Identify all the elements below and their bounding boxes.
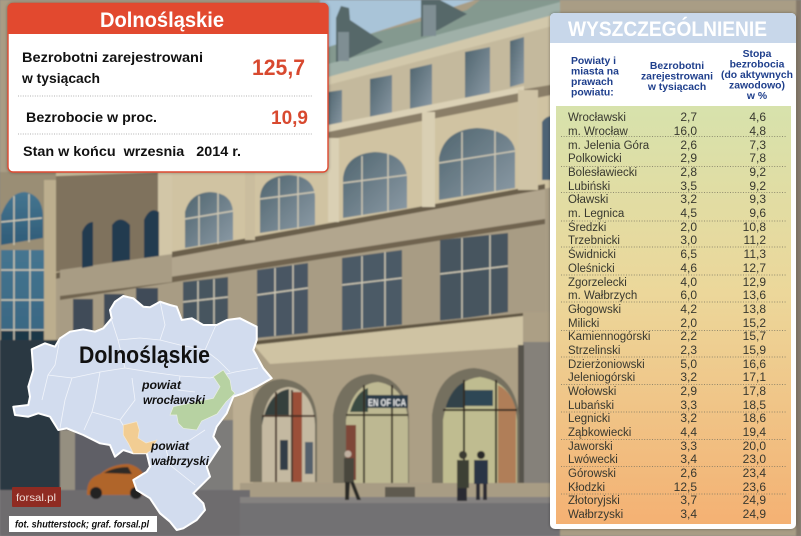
ground floor wall xyxy=(0,312,560,500)
table rows: 15,2 xyxy=(743,316,766,330)
table rows: m. Legnica xyxy=(568,208,625,220)
table rows: Dzierżoniowski xyxy=(568,359,645,371)
table rows: 13,8 xyxy=(743,302,766,316)
logo: forsal.pl: forsal.pl xyxy=(16,492,56,504)
table rows: 23,6 xyxy=(743,480,766,494)
dormer left xyxy=(336,6,383,62)
window storey wall xyxy=(60,219,545,345)
panel header: Dolnośląskie xyxy=(100,8,224,32)
rectangular window H xyxy=(342,250,402,332)
table rows: 12,9 xyxy=(743,275,766,289)
car xyxy=(87,464,146,499)
arch 1 xyxy=(250,379,317,482)
table rows: 4,5 xyxy=(680,206,697,220)
column header: unemployment rate: Stopa xyxy=(743,49,772,60)
column header: registered unemployed: Bezrobotni xyxy=(650,61,704,72)
arch 2 xyxy=(333,374,409,483)
table rows: Ząbkowiecki xyxy=(568,427,631,439)
table rows: Głogowski xyxy=(568,304,621,316)
table rows: 18,6 xyxy=(743,411,766,425)
column header: unemployment rate: (do aktywnych xyxy=(721,70,793,81)
table rows: 24,9 xyxy=(743,507,766,521)
table rows: 6,5 xyxy=(680,247,697,261)
table rows: 19,4 xyxy=(743,425,766,439)
column header: district xyxy=(571,56,619,98)
arched window D xyxy=(542,116,552,180)
map outline xyxy=(13,296,272,530)
table rows: 3,3 xyxy=(680,439,697,453)
sign in arch window xyxy=(366,395,408,409)
table rows: 17,1 xyxy=(743,370,766,384)
table rows: 7,3 xyxy=(749,138,766,152)
map title: Dolnośląskie xyxy=(79,342,210,369)
sign in arch window: EN OF ICA xyxy=(368,398,406,409)
narrow triple window xyxy=(82,210,159,268)
table rows: 7,8 xyxy=(749,151,766,165)
map: Dolnośląskie voivodeship xyxy=(13,296,272,530)
rectangular window G xyxy=(440,233,508,322)
roof xyxy=(328,0,560,76)
table rows: Lubański xyxy=(568,400,614,412)
table rows: 20,0 xyxy=(743,439,766,453)
label: powiat wałbrzyski: wałbrzyski xyxy=(151,454,210,468)
table rows: Wałbrzyski xyxy=(568,509,623,521)
table rows: 4,4 xyxy=(680,425,697,439)
unemployment rate value: 10,9 xyxy=(271,107,308,129)
label: powiat wrocławski xyxy=(141,378,206,407)
table rows: 3,7 xyxy=(680,493,697,507)
table rows: 2,8 xyxy=(680,165,697,179)
date note: Stan w końcu wrzesnia 2014 r. xyxy=(23,144,241,159)
table rows: m. Jelenia Góra xyxy=(568,140,650,152)
small windows K L M xyxy=(73,288,158,337)
column header: unemployment rate: zawodowo) xyxy=(729,80,785,92)
table rows: Jaworski xyxy=(568,441,613,453)
table rows: Wrocławski xyxy=(568,112,626,124)
table rows: 2,7 xyxy=(680,110,697,124)
table rows: 9,6 xyxy=(749,206,766,220)
table rows: 2,2 xyxy=(680,329,697,343)
table rows: 2,9 xyxy=(680,151,697,165)
column header: registered unemployed: zarejestrowani xyxy=(641,72,713,82)
table rows: 3,2 xyxy=(680,192,697,206)
panel header xyxy=(8,4,328,34)
column header: district: powiatu: xyxy=(571,88,614,98)
table rows: Milicki xyxy=(568,318,599,330)
table rows: 6,0 xyxy=(680,288,697,302)
table rows: 12,5 xyxy=(674,480,697,494)
table rows: 2,6 xyxy=(680,138,697,152)
table rows: 2,3 xyxy=(680,343,697,357)
table rows: 4,6 xyxy=(749,110,766,124)
powiat wrocławski: green area xyxy=(170,370,235,430)
table rows: 17,8 xyxy=(743,384,766,398)
storey ledges xyxy=(55,184,545,279)
table rows: 18,5 xyxy=(743,398,766,412)
table rows: 11,2 xyxy=(744,233,766,247)
rectangular window I xyxy=(257,263,308,338)
table rows: Kłodzki xyxy=(568,482,605,494)
pavement xyxy=(0,490,250,536)
column header: district: Powiaty i xyxy=(571,56,616,67)
table rows: Legnicki xyxy=(568,413,610,425)
table rows: 3,4 xyxy=(680,452,697,466)
relief spandrel band xyxy=(60,184,545,296)
table rows: Lubiński xyxy=(568,181,610,193)
table rows: 2,0 xyxy=(680,316,697,330)
arched window E xyxy=(185,192,233,248)
registered unemployed label: Bezrobotni zarejestrowani xyxy=(22,50,203,65)
table rows: Górowski xyxy=(568,468,616,480)
label: powiat wałbrzyski xyxy=(150,439,210,468)
table rows: 23,4 xyxy=(743,466,766,480)
table rows: Jeleniogórski xyxy=(568,372,635,384)
sky xyxy=(320,0,475,50)
left ground floor xyxy=(0,340,62,495)
panel: table by district xyxy=(550,13,796,529)
upper storey xyxy=(328,14,560,140)
table rows: 16,6 xyxy=(743,357,766,371)
table rows: 4,8 xyxy=(749,124,766,138)
arched window B xyxy=(343,152,407,218)
table rows: m. Wrocław xyxy=(568,126,629,138)
panel: Dolnośląskie summary xyxy=(8,4,328,172)
district borders xyxy=(42,301,258,485)
table rows: Średzki xyxy=(568,221,606,234)
column header: unemployment rate xyxy=(721,49,793,102)
table rows: Strzelinski xyxy=(568,345,620,357)
table rows: 3,2 xyxy=(680,411,697,425)
registered unemployed label xyxy=(21,50,203,86)
table rows: 10,8 xyxy=(743,220,766,234)
balcony ledge xyxy=(268,84,556,153)
table rows: 12,7 xyxy=(743,261,766,275)
table rows: 3,5 xyxy=(680,179,697,193)
table rows: 4,2 xyxy=(680,302,697,316)
table rows: Złotoryjski xyxy=(568,495,620,507)
table rows: 13,6 xyxy=(743,288,766,302)
table rows: Polkowicki xyxy=(568,153,622,165)
table rows: Oleśnicki xyxy=(568,263,615,275)
column header: unemployment rate: w % xyxy=(746,91,767,102)
table rows: 4,6 xyxy=(680,261,697,275)
table rows: Kamiennogórski xyxy=(568,331,650,343)
pedestrians group xyxy=(457,451,488,501)
pedestrian xyxy=(344,450,361,500)
registered unemployed value: 125,7 xyxy=(252,55,305,80)
rectangular window J xyxy=(183,277,228,330)
table rows xyxy=(568,110,766,521)
table rows: 2,0 xyxy=(680,220,697,234)
registered unemployed label: w tysiącach xyxy=(21,71,100,86)
table rows: 5,0 xyxy=(680,357,697,371)
logo: forsal.pl xyxy=(12,487,61,507)
table rows: 2,6 xyxy=(680,466,697,480)
arched window C xyxy=(439,128,515,200)
unemployment rate label: Bezrobocie w proc. xyxy=(26,110,157,125)
arched window A xyxy=(260,175,315,233)
main storey wall xyxy=(0,92,560,280)
table rows: 23,0 xyxy=(743,452,766,466)
label: powiat wałbrzyski: powiat xyxy=(150,439,190,453)
table rows: Oławski xyxy=(568,194,608,206)
table rows: 2,9 xyxy=(680,384,697,398)
arch 3 xyxy=(432,368,519,487)
column header: district: miasta na xyxy=(571,66,619,78)
table rows: 3,4 xyxy=(680,507,697,521)
table rows: 11,3 xyxy=(744,247,766,261)
table rows: Świdnicki xyxy=(568,248,616,261)
plinth xyxy=(240,483,560,500)
table rows: 24,9 xyxy=(743,493,766,507)
table rows: 9,2 xyxy=(749,179,766,193)
recessed bay in shadow xyxy=(56,172,170,272)
table rows: 16,0 xyxy=(674,124,697,138)
table rows: 15,7 xyxy=(743,329,766,343)
table rows: 3,2 xyxy=(680,370,697,384)
table rows: Lwówecki xyxy=(568,454,618,466)
table rows: Trzebnicki xyxy=(568,235,620,247)
table rows: Bolesławiecki xyxy=(568,167,637,179)
table rows: 9,3 xyxy=(749,192,766,206)
column header: registered unemployed: w tysiącach xyxy=(647,82,706,93)
table heading band xyxy=(550,13,796,43)
pilasters xyxy=(422,112,435,207)
label: powiat wrocławski: wrocławski xyxy=(143,393,206,407)
column header: district: prawach xyxy=(571,77,613,88)
photo credit: fot. shutterstock; graf. forsal.pl xyxy=(15,520,149,530)
left tower windows xyxy=(0,172,56,412)
column header: registered unemployed xyxy=(641,61,713,93)
table rows: m. Wałbrzych xyxy=(568,290,637,302)
powiat wałbrzyski: orange area xyxy=(123,422,157,453)
upper windows xyxy=(328,37,524,134)
column header: unemployment rate: bezrobocia xyxy=(730,60,785,70)
table rows: Zgorzelecki xyxy=(568,277,627,289)
table rows: 15,9 xyxy=(743,343,766,357)
dormer right xyxy=(421,0,467,37)
table rows: Wołowski xyxy=(568,386,616,398)
table rows: 3,0 xyxy=(680,233,697,247)
photo credit xyxy=(9,516,157,532)
table rows: 9,2 xyxy=(749,165,766,179)
table heading band: WYSZCZEGÓLNIENIE xyxy=(568,17,767,41)
label: powiat wrocławski: powiat xyxy=(141,378,182,392)
table rows: 3,3 xyxy=(680,398,697,412)
table rows: 4,0 xyxy=(680,275,697,289)
table body background xyxy=(556,106,791,524)
